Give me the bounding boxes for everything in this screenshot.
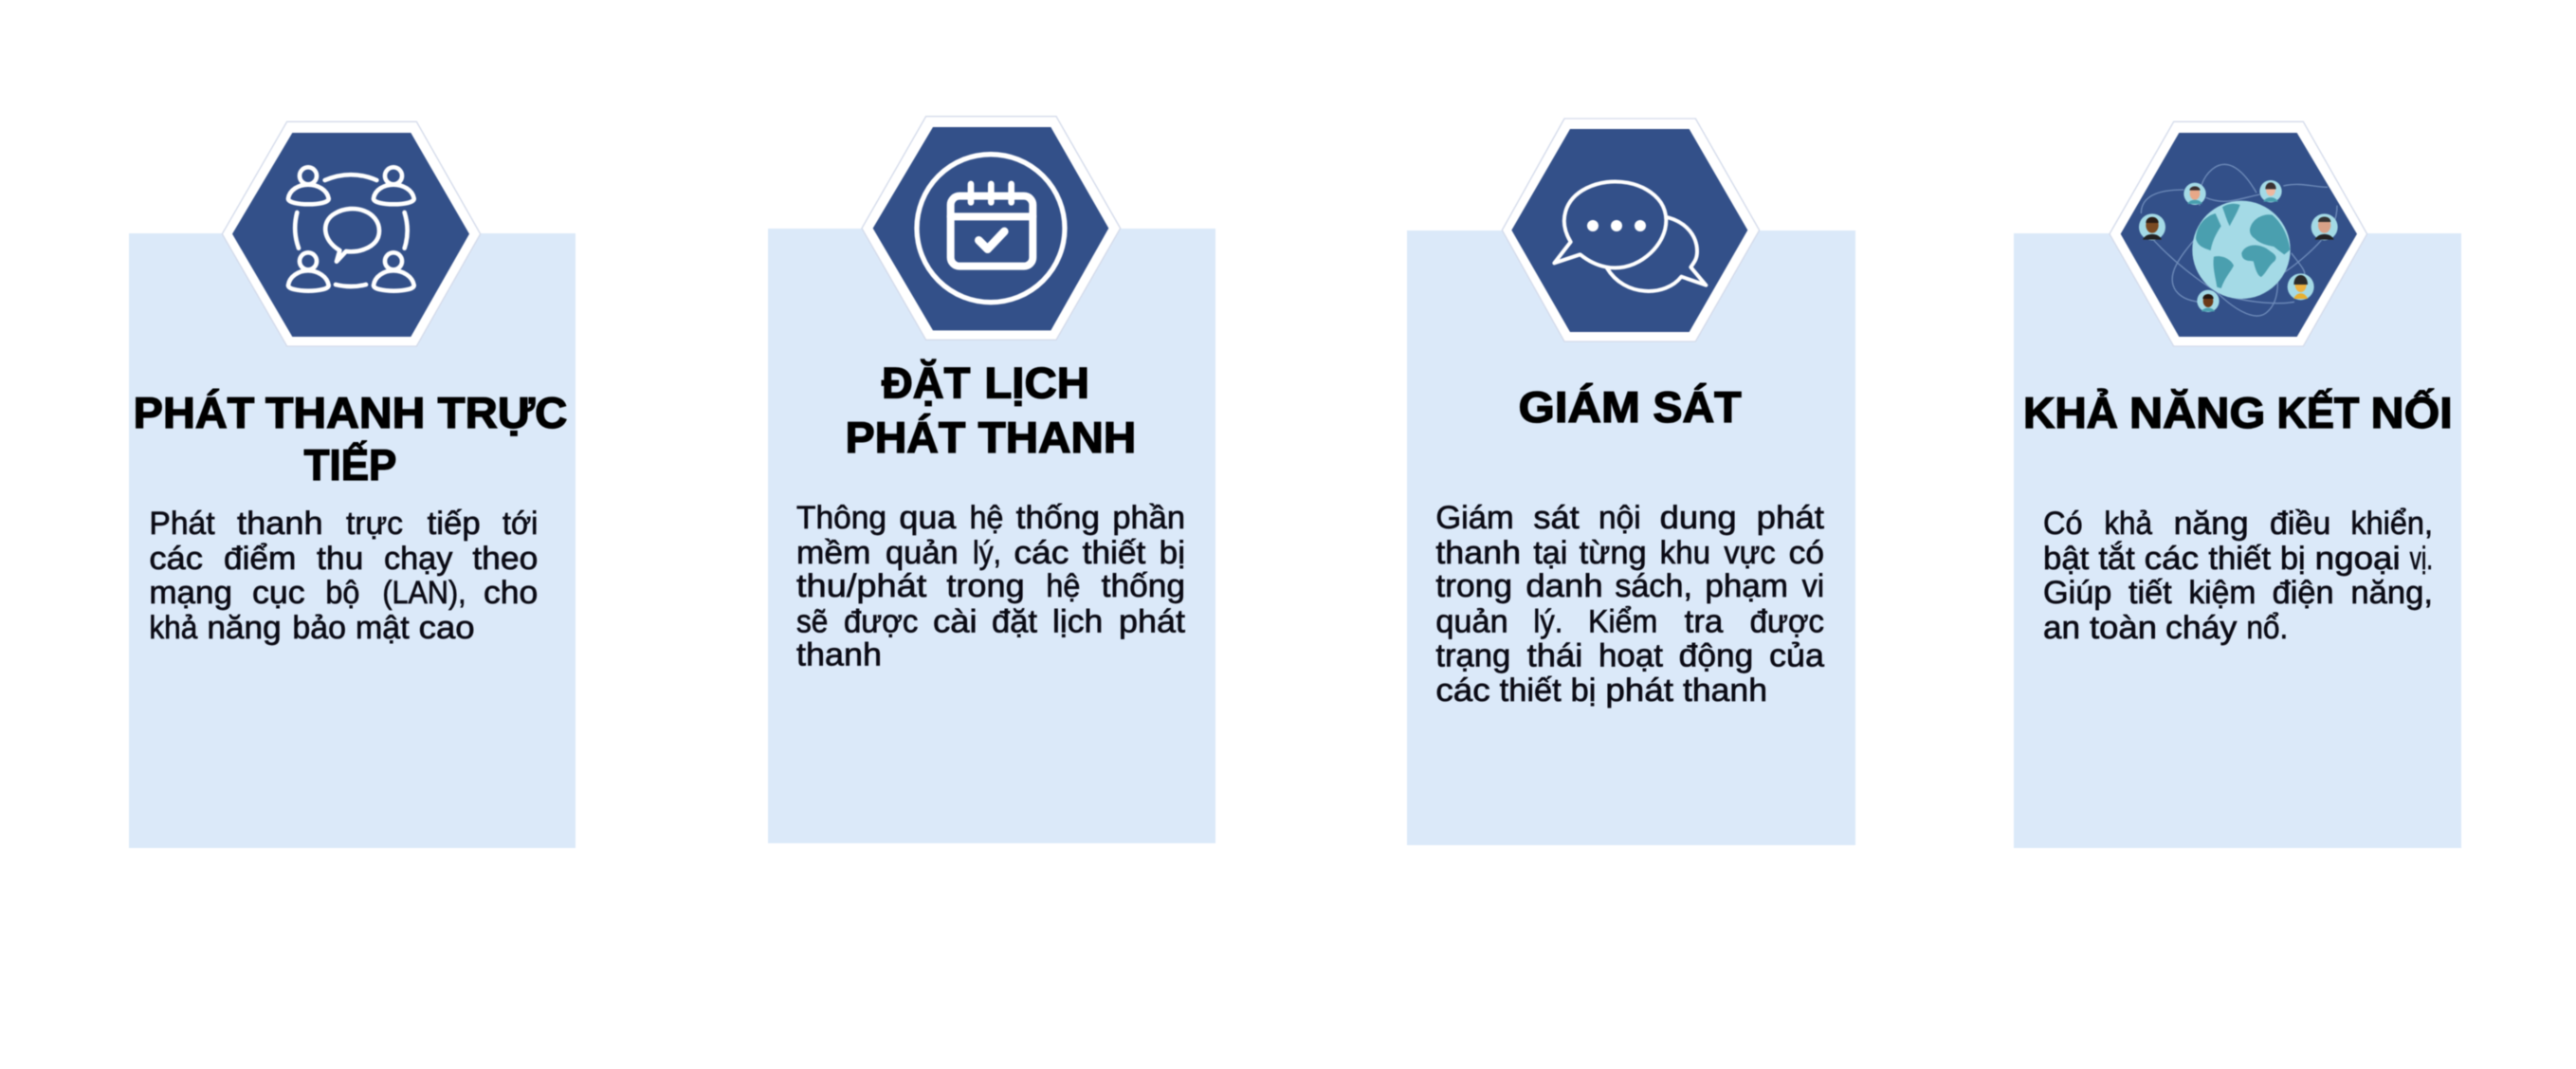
panel: khả năng kết nối [2014,121,2461,848]
body text 3: thiết [1500,672,1562,708]
body text 3: Giám [1435,499,1514,535]
body text 3: của [1769,637,1824,673]
heading: khả năng kết nối: KẾT [2277,389,2359,437]
body text 3: thanh [1435,534,1521,570]
heading: đặt lịch phát thanh: ĐẶT [882,359,970,407]
body text 3: các [1435,672,1490,708]
body text 2: quản [886,534,959,570]
card background 1 [129,233,575,848]
body text 2: qua [899,499,956,535]
body text 2 [796,499,1185,673]
body text 4: điện [2273,574,2334,610]
heading: phát thanh trực tiếp: TIẾP [304,441,396,489]
body text 3: từng [1580,534,1647,570]
body text 2: các [1014,534,1069,570]
body text 3: vực [1724,534,1776,570]
body text 2: sẽ [796,603,828,639]
body text 1: bộ [325,574,359,610]
body text 4: khiển, [2350,505,2433,541]
body text 4: năng, [2350,574,2433,610]
panel: giám sát [1407,119,1855,845]
body text 4: tắt [2098,540,2135,576]
body text 1: (LAN), [382,574,466,610]
heading: giám sát: GIÁM [1519,382,1640,432]
body text 1: tới [502,505,538,541]
body text 4: tiết [2128,574,2172,610]
body text 2: hệ [1046,567,1080,603]
body text 3: được [1750,603,1824,639]
icon: two speech bubbles in hexagon [1502,119,1760,341]
body text 1: các [149,540,203,576]
body text 2: thu/phát [796,567,926,603]
panel: đặt lịch phát thanh [768,117,1215,843]
body text 4: cháy [2165,609,2237,645]
body text 1: chạy [384,540,452,576]
body text 3: dung [1660,499,1737,535]
body text 3: quản [1435,603,1508,639]
body text 1: mạng [149,574,232,610]
body text 2: Thông [796,499,886,535]
card background 3 [1407,230,1855,845]
body text 1: điểm [224,540,296,576]
body text 4: Giúp [2043,574,2111,610]
body text 3: trạng [1435,637,1510,673]
body text 4: năng [2174,505,2249,541]
body text 2: lịch [1052,603,1103,639]
body text 3: thái [1527,637,1582,673]
body text 2: thống [1102,567,1185,603]
body text 2: bị [1160,534,1185,570]
body text 3: trong [1435,567,1512,603]
body text 4: các [2145,540,2199,576]
body text 2: thanh [796,636,882,673]
panel: phát thanh trực tiếp [129,121,575,848]
heading: đặt lịch phát thanh [846,359,1136,462]
body text 3: phạm [1705,567,1788,603]
icon: people around a speech bubble in hexagon [222,121,481,346]
body text 1 [149,505,538,645]
heading: phát thanh trực tiếp: TRỰC [438,389,567,437]
body text 4: ngoại [2315,540,2401,576]
body text 3 [1435,499,1824,708]
heading: khả năng kết nối: NĂNG [2129,389,2265,437]
body text 2: thống [1016,499,1100,535]
body text 2: cài [933,603,977,639]
body text 1: bảo [292,609,346,645]
body text 1: khả [149,609,197,645]
heading: đặt lịch phát thanh: PHÁT [846,414,965,462]
body text 3: vi [1802,567,1824,603]
heading: khả năng kết nối: KHẢ [2023,389,2118,437]
body text 2: được [844,603,918,639]
body text 1: cao [419,609,475,645]
heading: đặt lịch phát thanh: LỊCH [984,359,1089,407]
body text 3: Kiểm [1588,603,1657,639]
body text 2: phần [1112,499,1185,535]
body text 3: lý. [1533,603,1562,639]
body text 4: toàn [2090,609,2157,645]
body text 4: bị [2280,540,2306,576]
body text 3: nội [1599,499,1641,535]
body text 4: vị. [2410,540,2433,576]
body text 2: trong [946,567,1025,603]
icon: globe with connected people in hexagon [2110,121,2367,346]
heading: giám sát [1519,382,1742,432]
card background 4 [2014,233,2461,848]
body text 1: thu [317,540,363,576]
body text 2: lý, [973,534,1001,570]
body text 4: an [2043,609,2080,645]
icon: calendar with check in hexagon [862,117,1121,340]
heading: phát thanh trực tiếp: PHÁT [134,389,254,437]
body text 3: sách, [1615,567,1692,603]
body text 1: trực [346,505,403,541]
heading: khả năng kết nối: NỐI [2371,389,2453,437]
body text 2: thiết [1083,534,1145,570]
body text 4 [2043,505,2433,645]
body text 4: nổ. [2246,609,2288,645]
body text 3: danh [1526,567,1603,603]
body text 1: Phát [149,505,215,541]
body text 3: tại [1533,534,1567,570]
body text 1: năng [207,609,282,645]
body text 3: có [1789,534,1824,570]
body text 3: khu [1660,534,1710,570]
body text 3: phát [1605,672,1673,708]
body text 4: Có [2043,505,2083,541]
body text 3: động [1679,637,1753,673]
card background 2 [768,229,1215,843]
body text 1: cục [252,574,305,610]
body text 3: sát [1533,499,1580,535]
body text 4: khả [2104,505,2152,541]
body text 1: mật [356,609,410,645]
body text 1: cho [484,574,538,610]
body text 3: bị [1571,672,1596,708]
heading: đặt lịch phát thanh: THANH [978,414,1136,462]
body text 3: hoạt [1599,637,1663,673]
body text 2: hệ [970,499,1003,535]
body text 4: kiệm [2188,574,2256,610]
body text 4: điều [2270,505,2330,541]
body text 2: phát [1119,603,1185,639]
body text 2: mềm [796,534,870,570]
body text 2: đặt [992,603,1037,639]
heading: phát thanh trực tiếp: THANH [265,389,425,437]
body text 1: thanh [237,505,323,541]
heading: giám sát: SÁT [1653,382,1742,432]
body text 3: thanh [1683,672,1767,708]
body text 3: phát [1757,499,1824,535]
heading: khả năng kết nối [2023,389,2453,437]
body text 1: theo [472,540,538,576]
body text 1: tiếp [428,505,481,541]
body text 4: thiết [2208,540,2271,576]
body text 4: bật [2043,540,2089,576]
body text 3: tra [1685,603,1723,639]
heading: phát thanh trực tiếp [134,389,567,489]
